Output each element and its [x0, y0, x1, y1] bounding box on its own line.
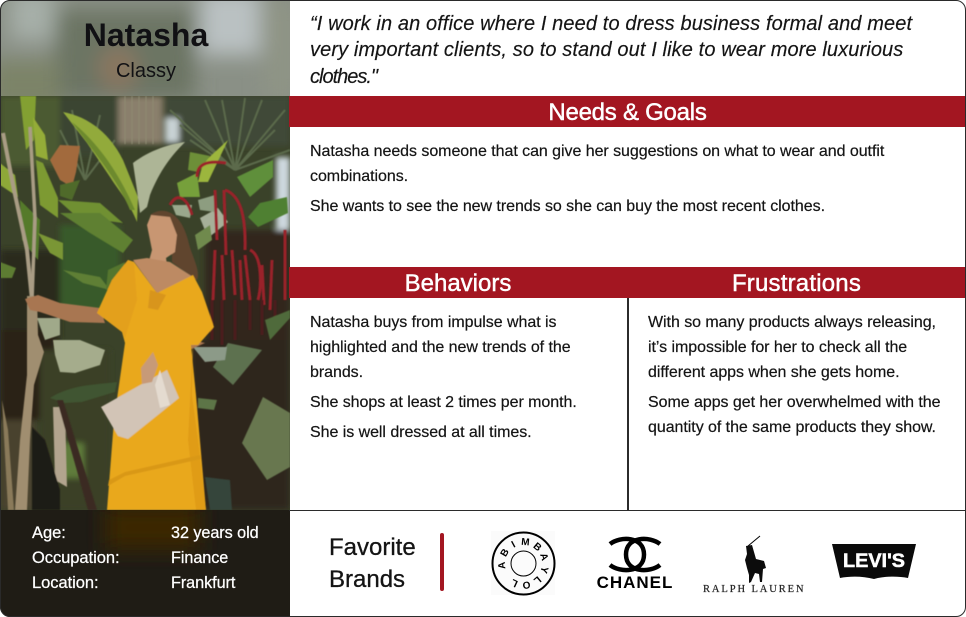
photo: woman in yellow dress among tropical plants	[0, 96, 290, 510]
heading: favorite brands	[329, 534, 416, 592]
text block: frustrations: quantity of the same products they show.	[648, 419, 936, 436]
heading bar: frustrations	[627, 267, 966, 298]
text block: demographic labels: Occupation:	[32, 549, 120, 567]
face and neck	[146, 214, 178, 262]
blurred header band	[0, 0, 290, 96]
text block: demographic values: Frankfurt	[171, 574, 235, 592]
quote: “I work in an office where I need to dress business formal and meet	[310, 12, 912, 34]
heading bar: needs and goals: Needs & Goals	[548, 99, 707, 126]
quote	[310, 12, 913, 88]
accent divider	[440, 533, 444, 591]
text block: needs and goals	[310, 143, 884, 215]
text block: demographic labels: Age:	[32, 524, 66, 542]
text block: behaviors: brands.	[310, 364, 363, 381]
panel: photo column	[0, 0, 290, 617]
mid leaves	[58, 200, 123, 223]
dark info band	[0, 505, 290, 617]
text block: behaviors	[310, 314, 577, 441]
yellow dress	[97, 260, 214, 510]
hair	[150, 211, 198, 280]
logo: Bimba y Lola: Y	[537, 565, 550, 575]
logo: Levi's: LEVI'S	[843, 551, 905, 572]
logo: Bimba y Lola: I	[510, 539, 518, 550]
lower leaves	[53, 340, 105, 373]
text block: demographic labels	[32, 524, 120, 592]
heading: favorite brands: Brands	[329, 566, 405, 592]
logo: Bimba y Lola: A	[537, 552, 550, 562]
heading bar: frustrations: Frustrations	[732, 270, 861, 297]
brown leaf	[50, 145, 80, 187]
right arm	[190, 342, 205, 350]
pale banana leaf	[133, 142, 185, 213]
quote: very important clients, so to stand out I like to wear more luxurious	[310, 39, 903, 61]
text block: behaviors: She is well dressed at all times.	[310, 424, 532, 441]
red hanging flowers	[170, 162, 285, 310]
clutch bag	[101, 370, 179, 439]
heading bar: behaviors	[289, 267, 627, 298]
logo: Bimba y Lola: O	[522, 578, 531, 590]
text block: needs and goals: She wants to see the new trends so she can buy the most recent clothes.	[310, 198, 825, 215]
text block: frustrations: it’s impossible for her to check all the	[648, 339, 907, 356]
logo: Levi's	[832, 544, 916, 579]
heading bar: behaviors: Behaviors	[405, 270, 511, 297]
heading bar: needs and goals	[289, 96, 966, 127]
large green banana leaf	[63, 112, 138, 222]
text block: behaviors: She shops at least 2 times per month.	[310, 394, 577, 411]
text block: frustrations: Some apps get her overwhelmed with the	[648, 394, 940, 411]
text block: needs and goals: combinations.	[310, 168, 408, 185]
green leaves left	[20, 96, 36, 150]
heading: persona name: Natasha	[84, 17, 208, 53]
logo: Bimba y Lola: B	[531, 541, 543, 554]
text block: frustrations: With so many products always releasing,	[648, 314, 936, 331]
heading: favorite brands: Favorite	[329, 534, 416, 561]
logo: Bimba y Lola: L	[510, 576, 520, 589]
text block: demographic values: Finance	[171, 549, 228, 567]
logo: Bimba y Lola	[492, 532, 556, 596]
logo: Bimba y Lola: B	[499, 547, 512, 559]
logo: Bimba y Lola: L	[531, 573, 543, 586]
logo: Bimba y Lola: A	[497, 561, 508, 569]
subheading: persona type: Classy	[116, 60, 176, 82]
text block: needs and goals: Natasha needs someone that can give her suggestions on what to wear and outfit	[310, 143, 884, 160]
text block: frustrations: different apps when she gets home.	[648, 364, 900, 381]
text block: behaviors: Natasha buys from impulse what is	[310, 314, 556, 331]
logo: Bimba y Lola: M	[521, 537, 530, 548]
logo: Ralph Lauren	[703, 536, 805, 594]
right leaves	[198, 140, 228, 182]
quote: clothes."	[310, 66, 377, 88]
hand on bag	[141, 352, 158, 384]
left arm	[25, 295, 105, 323]
text block: demographic values: 32 years old	[171, 524, 259, 542]
text block: demographic labels: Location:	[32, 574, 99, 592]
text block: frustrations	[648, 314, 940, 436]
logo: Chanel	[597, 536, 673, 591]
text block: demographic values	[171, 524, 259, 592]
thin tree trunk	[3, 127, 35, 300]
text block: behaviors: highlighted and the new trends of the	[310, 339, 571, 356]
palm fronds	[60, 98, 290, 180]
